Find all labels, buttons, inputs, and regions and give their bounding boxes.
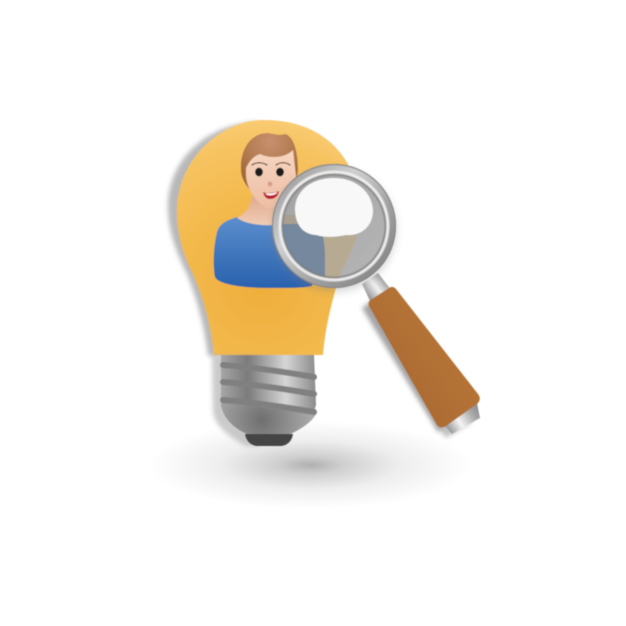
handle shadow [362,292,470,432]
teeth [265,192,278,195]
lens: shirt reflection [282,224,326,276]
shirt [214,217,320,288]
socket body [221,355,316,435]
light bulb glass [177,120,365,355]
socket lower shading [221,402,316,435]
lens ring [276,168,392,284]
lens inner edge [282,174,386,278]
magnifying glass [270,164,480,438]
metal neck [362,273,392,305]
socket contact [245,434,293,446]
bulb screw base [212,355,316,446]
bulb drop shadow [168,122,258,356]
eyebrows [252,163,290,165]
lens: bright bulb cap [295,178,373,237]
socket shadow [212,356,260,446]
lens glass [281,173,387,280]
end cap shadow [438,410,472,438]
wooden handle [369,287,480,427]
ring outer edge [272,164,396,288]
nose [268,182,272,186]
neck [237,190,300,225]
floor shadow [148,421,472,509]
artwork group [168,120,480,446]
hair [241,133,298,196]
lens: bulb stem [323,235,357,282]
illustration: light bulb with person under magnifying glass [165,119,481,500]
thread ridges [223,365,314,412]
lens shadow [272,168,396,292]
person [214,133,320,288]
lens: neck reflection [282,215,298,224]
ring highlight [280,172,388,280]
metal end cap [442,398,480,434]
mouth [263,191,279,199]
face [246,150,296,209]
eyes [255,168,263,176]
